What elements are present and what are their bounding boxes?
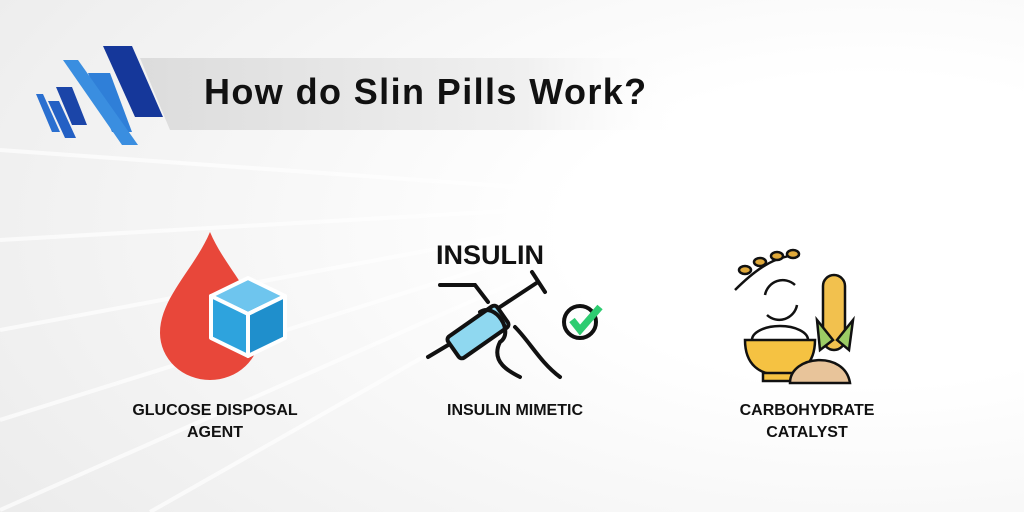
label: glucose [132, 402, 298, 441]
label: carbohydrate: CARBOHYDRATE [740, 402, 874, 419]
label: glucose: AGENT [187, 424, 243, 441]
icon: insulin syringe: INSULIN [436, 240, 544, 270]
icon: carbohydrate [734, 248, 855, 384]
label: glucose: GLUCOSE DISPOSAL [132, 402, 298, 419]
label: carbohydrate [740, 402, 874, 441]
icon: insulin syringe [426, 240, 603, 380]
logo [36, 46, 163, 145]
title: How do Slin Pills Work? [204, 71, 648, 112]
label: insulin: INSULIN MIMETIC [447, 402, 583, 419]
title band [140, 58, 690, 130]
label: carbohydrate: CATALYST [766, 424, 848, 441]
icon: blood drop with cube [160, 232, 287, 380]
